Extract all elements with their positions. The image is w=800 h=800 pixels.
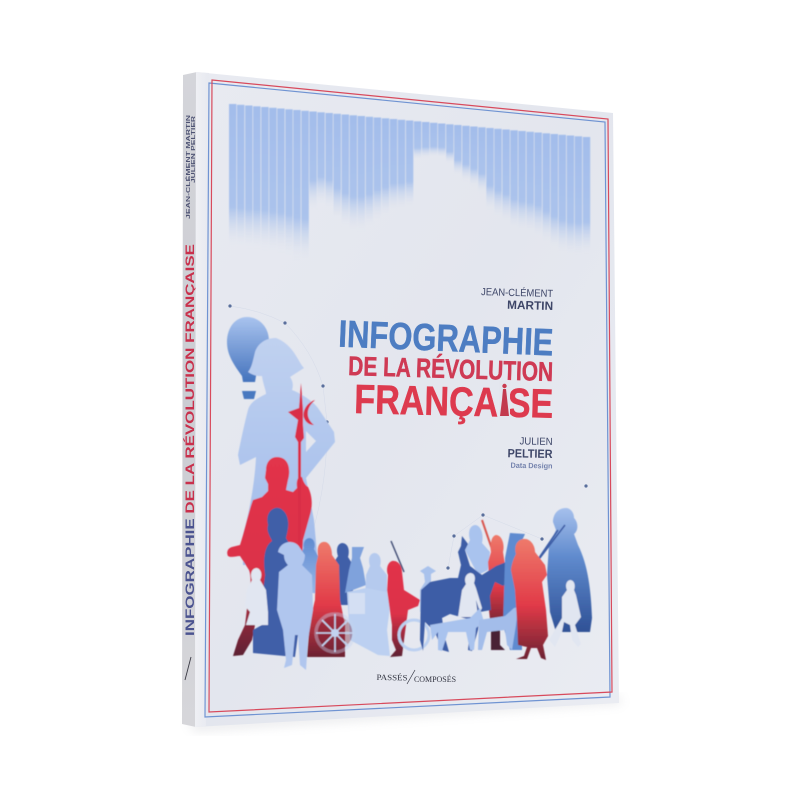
figure: second greyhound (478, 607, 518, 650)
book front cover (195, 72, 619, 727)
author: Julien Peltier (507, 436, 553, 471)
icon: woman replacing the letter I (499, 381, 510, 420)
spine title: INFOGRAPHIE DE LA RÉVOLUTION FRANÇAISE (184, 244, 197, 636)
figure: pale man in tricorn (277, 542, 313, 670)
spine authors (184, 115, 197, 219)
figure: woman in wide hat (503, 533, 525, 650)
book spine (182, 72, 197, 727)
figure: blue man behind (253, 508, 300, 657)
publisher logo: COMPOSÉS (414, 674, 456, 684)
figure: carriage with wheel (316, 588, 390, 656)
figure: pale man (365, 553, 387, 600)
cast shadow (186, 696, 622, 732)
figure: child with rifle, right (549, 580, 581, 647)
author: Jean-Clément Martin: JEAN-CLÉMENT (481, 285, 554, 300)
figure: woman with hat (345, 547, 366, 593)
figure: child with rifle (245, 568, 268, 625)
figure: first greyhound (430, 608, 484, 651)
figure: man in wide hat (420, 566, 436, 615)
Bastille bar chart silhouette (229, 104, 590, 261)
title line 2: DE LA RÉVOLUTION (348, 350, 554, 387)
author: Julien Peltier: JULIEN (519, 436, 553, 448)
author: Jean-Clément Martin: MARTIN (507, 298, 553, 313)
publisher logo (376, 670, 456, 684)
figure: pale child with rifle (458, 573, 482, 617)
icon: hot-air balloon (227, 317, 269, 399)
illustration: crowd of revolutionary figures (227, 317, 592, 670)
publisher logo: PASSÉS (376, 672, 408, 682)
figure: woman with tall red pike (482, 520, 510, 628)
spine authors: JEAN-CLÉMENT MARTIN (184, 115, 192, 219)
title line 3: FRANÇAISE (354, 376, 554, 427)
figure: small wheel (399, 620, 429, 650)
author: Julien Peltier: Data Design (510, 461, 553, 471)
figure: dark man in coat (333, 543, 354, 605)
figure: lead woman in red dress (511, 539, 548, 660)
figure: pale blue man on the horse (465, 525, 490, 575)
figure: red guard (227, 457, 312, 656)
spine publisher slash (185, 657, 191, 680)
constellation lines and dots (228, 304, 588, 570)
spine authors: JULIEN PELTIER (191, 116, 197, 183)
figure: red soldier with musket (387, 541, 420, 657)
author: Julien Peltier: PELTIER (507, 446, 553, 461)
title (338, 314, 554, 427)
figure: cloaked figure (547, 508, 592, 632)
figure: halberd (288, 383, 315, 545)
tricolour border (205, 80, 612, 717)
figure: dark boots (491, 628, 505, 650)
figure: woman in red dress (307, 542, 345, 657)
title line 1: INFOGRAPHIE (338, 314, 554, 364)
figure: Napoleon silhouette (238, 338, 335, 565)
figure: medium blue man (298, 538, 318, 594)
figure: rifles (536, 525, 565, 563)
figure: rider and dark horse (420, 536, 511, 652)
author: Jean-Clément Martin (481, 285, 554, 313)
